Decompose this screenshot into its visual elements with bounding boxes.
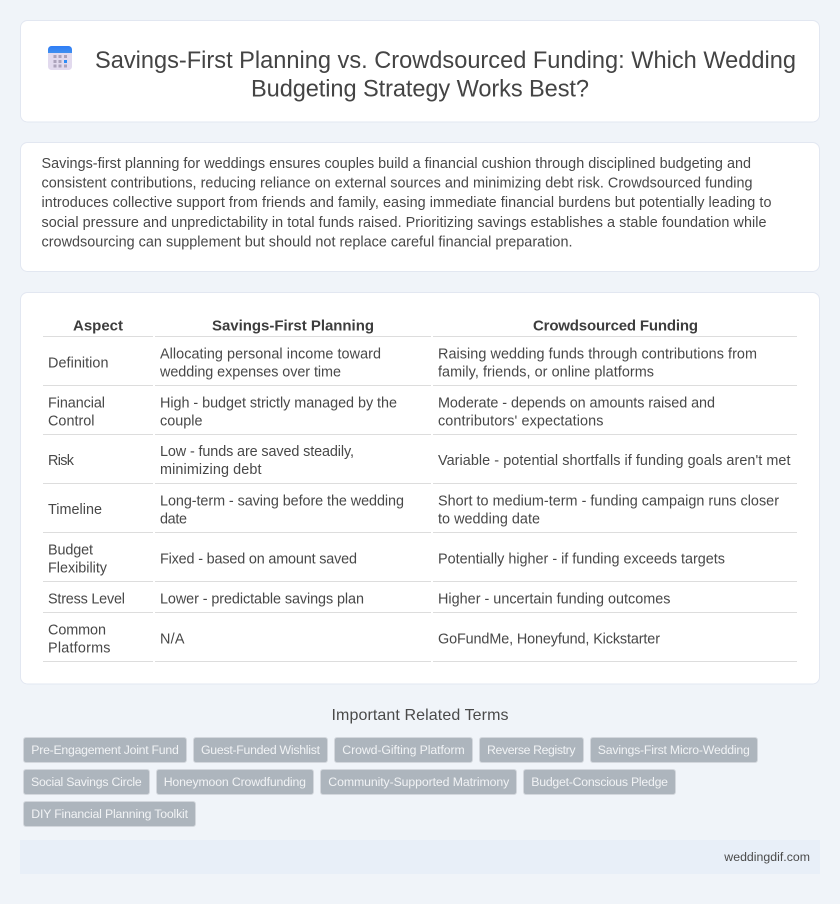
intro paragraph (42, 156, 772, 250)
footer (20, 840, 820, 874)
row: financial control: Financial (48, 395, 105, 411)
row: financial control: contributors' expectations (438, 413, 604, 429)
intro paragraph: consistent contributions, reducing reliance on external sources and minimizing debt risk. Crowdsourced funding (42, 176, 752, 192)
row: stress level: Higher - uncertain funding outcomes (438, 591, 670, 607)
row: definition: family, friends, or online platforms (438, 364, 654, 380)
tag: DIY Financial Planning Toolkit (31, 807, 189, 821)
row: definition: Allocating personal income toward (160, 346, 381, 362)
intro paragraph: social pressure and unpredictability in total funds raised. Prioritizing savings establishes a stable foundation while (42, 215, 766, 231)
row: risk: Risk (48, 453, 75, 469)
tag (156, 770, 314, 794)
row: budget flexibility: Budget (48, 542, 93, 558)
row: budget flexibility: Potentially higher - if funding exceeds targets (438, 551, 725, 567)
row: financial control: couple (160, 413, 202, 429)
tag (24, 802, 196, 826)
row: stress level: Stress Level (48, 591, 125, 607)
tag: Honeymoon Crowdfunding (164, 775, 306, 789)
intro paragraph: crowdsourcing can supplement but should not replace careful financial preparation. (42, 234, 572, 250)
title: Budgeting Strategy Works Best? (251, 76, 589, 102)
row: financial control: High - budget strictly managed by the (160, 395, 397, 411)
row: budget flexibility (43, 542, 797, 582)
row: timeline: Long-term - saving before the wedding (160, 493, 404, 509)
tag: Guest-Funded Wishlist (201, 743, 321, 757)
row: common platforms: N/A (160, 631, 185, 647)
tag (590, 738, 758, 762)
title: Savings-First Planning vs. Crowdsourced Funding: Which Wedding (95, 48, 796, 74)
tag (524, 770, 676, 794)
title (95, 48, 796, 102)
tag (480, 738, 584, 762)
row: timeline (43, 493, 797, 533)
tag: Crowd-Gifting Platform (342, 743, 465, 757)
row: timeline: Timeline (48, 502, 102, 518)
tag (24, 770, 150, 794)
tag: Pre-Engagement Joint Fund (31, 743, 179, 757)
row: definition: wedding expenses over time (159, 364, 341, 380)
tag (194, 738, 328, 762)
row: financial control: Control (48, 413, 94, 429)
intro paragraph: introduces collective support from friends and family, easing immediate financial burdens but potentially leading to (42, 195, 772, 211)
tag (334, 738, 472, 762)
row: stress level: Lower - predictable savings plan (160, 591, 364, 607)
row: financial control (43, 395, 797, 435)
table header: Aspect (73, 318, 123, 334)
panel: introduction (20, 142, 820, 272)
heading: related terms: Important Related Terms (332, 707, 508, 724)
panel: title card (20, 20, 820, 122)
row: common platforms: GoFundMe, Honeyfund, Kickstarter (438, 631, 660, 647)
row: definition (43, 346, 797, 386)
tag (320, 770, 516, 794)
icon: calendar (48, 46, 72, 70)
row: timeline: date (160, 511, 187, 527)
row: common platforms: Platforms (48, 640, 110, 656)
row: risk: minimizing debt (160, 462, 262, 478)
row: timeline: Short to medium-term - funding campaign runs closer (438, 493, 779, 509)
tag: Community-Supported Matrimony (328, 775, 510, 789)
row: definition: Definition (48, 355, 108, 371)
table header: Crowdsourced Funding (533, 318, 698, 334)
row: budget flexibility: Flexibility (48, 560, 108, 576)
row: budget flexibility: Fixed - based on amount saved (160, 551, 357, 567)
tag: Budget-Conscious Pledge (531, 775, 668, 789)
tag: Social Savings Circle (31, 775, 142, 789)
table header: Savings-First Planning (212, 318, 374, 334)
panel: comparison table (20, 292, 820, 684)
row: timeline: to wedding date (438, 511, 540, 527)
row: risk: Low - funds are saved steadily, (160, 444, 354, 460)
row: financial control: Moderate - depends on amounts raised and (438, 395, 715, 411)
row: common platforms: Common (48, 622, 106, 638)
tag (24, 738, 186, 762)
row: stress level (43, 591, 797, 613)
row: common platforms (43, 622, 797, 662)
panel: related term tags (24, 738, 758, 826)
row: risk: Variable - potential shortfalls if funding goals aren't met (438, 453, 790, 469)
tag: Savings-First Micro-Wedding (598, 743, 750, 757)
footer: weddingdif.com (723, 850, 810, 864)
tag: Reverse Registry (487, 743, 576, 757)
intro paragraph: Savings-first planning for weddings ensures couples build a financial cushion through disciplined budgeting and (42, 156, 751, 172)
table header (43, 318, 797, 337)
row: definition: Raising wedding funds through contributions from (438, 346, 757, 362)
row: risk (43, 444, 797, 484)
